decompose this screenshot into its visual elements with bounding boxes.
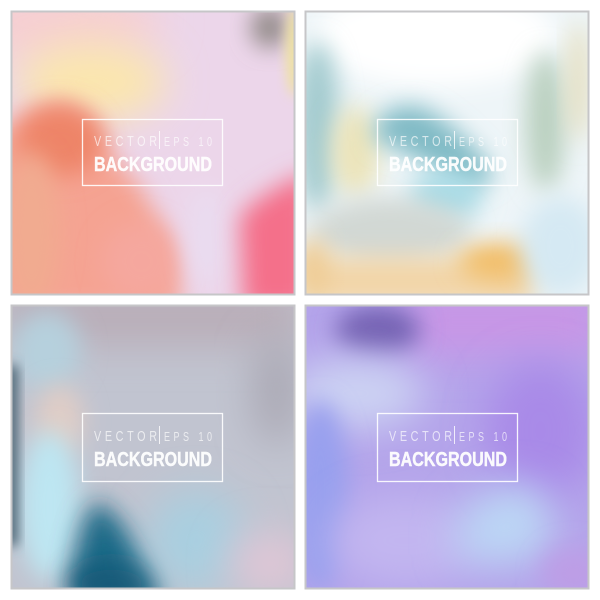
label box: bottom right: EPS 10 (459, 431, 507, 444)
label box: bottom left (82, 414, 222, 482)
label box: top right (378, 120, 518, 186)
label box: top left: EPS 10 (164, 136, 212, 149)
label box: bottom left: BACKGROUND (94, 449, 212, 471)
panel: warm pink and coral gradient (10, 10, 296, 296)
label box: bottom right: VECTOR (389, 427, 452, 444)
label box: bottom right: BACKGROUND (389, 449, 507, 471)
label box: top left: BACKGROUND (94, 154, 212, 176)
label box: top left (82, 120, 222, 186)
label box: bottom right (378, 414, 518, 482)
label box: top right: BACKGROUND (389, 154, 507, 176)
panel: pale white and teal gradient (304, 10, 590, 296)
label box: bottom left: EPS 10 (164, 431, 212, 444)
panel: muted grey and deep teal gradient (10, 304, 296, 590)
label box: top left: VECTOR (94, 132, 157, 149)
panel: violet and periwinkle gradient (304, 304, 590, 590)
label box: top right: VECTOR (389, 132, 452, 149)
label box: bottom left: VECTOR (94, 427, 157, 444)
label box: top right: EPS 10 (459, 136, 507, 149)
